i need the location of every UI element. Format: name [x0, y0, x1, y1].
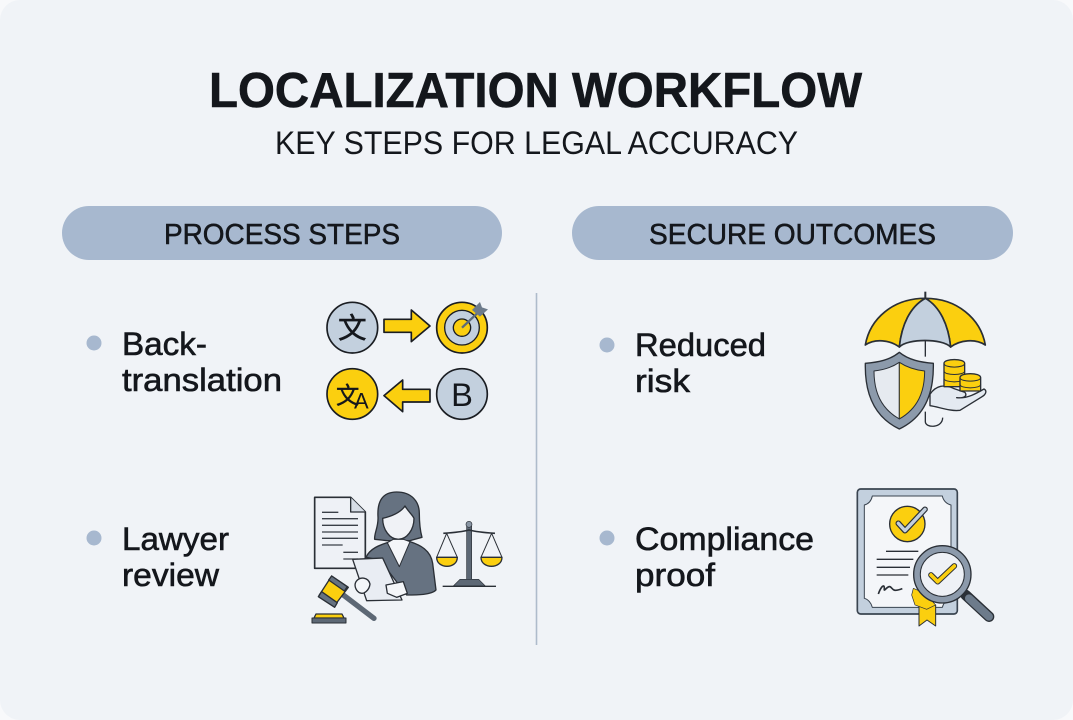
list item: back-translation: [86, 326, 282, 398]
icon: back-translation loop: 文: [338, 306, 367, 347]
panel header: secure outcomes: SECURE OUTCOMES: [649, 219, 936, 251]
list item: reduced risk: risk: [635, 363, 691, 399]
icon: back-translation loop: A: [354, 388, 369, 413]
icon: umbrella, shield and coins: [865, 292, 986, 429]
panel header: secure outcomes: [572, 206, 1013, 260]
hand with coins: [930, 360, 986, 411]
icon: back-translation loop: [327, 302, 488, 419]
list item: lawyer review: Lawyer: [122, 521, 229, 557]
list item: reduced risk: [600, 327, 766, 399]
list item: back-translation: Back-: [122, 326, 207, 362]
title: LOCALIZATION WORKFLOW: [209, 64, 863, 118]
panel header: process steps: [62, 206, 502, 260]
scales: [437, 521, 502, 586]
magnifier: [914, 546, 989, 617]
shield: [865, 352, 933, 429]
icon: compliance certificate with magnifier: [857, 489, 989, 626]
gavel: [312, 576, 374, 623]
list item: back-translation: translation: [122, 362, 282, 398]
list item: lawyer review: review: [122, 557, 220, 593]
icon: back-translation loop: B: [451, 376, 473, 413]
document: [315, 497, 365, 568]
umbrella: [865, 292, 985, 426]
list item: compliance proof: Compliance: [635, 521, 814, 557]
ribbon seal: [912, 588, 936, 626]
list item: reduced risk: Reduced: [635, 327, 766, 363]
lawyer: [353, 492, 436, 601]
list item: compliance proof: [600, 521, 814, 593]
icon: lawyer with document, gavel and scales: [312, 492, 502, 623]
list item: lawyer review: [86, 521, 229, 593]
list item: compliance proof: proof: [635, 557, 715, 593]
panel header: process steps: PROCESS STEPS: [164, 219, 400, 251]
certificate: [857, 489, 957, 614]
subtitle: KEY STEPS FOR LEGAL ACCURACY: [275, 125, 798, 161]
icon: back-translation loop: 文: [336, 376, 359, 410]
